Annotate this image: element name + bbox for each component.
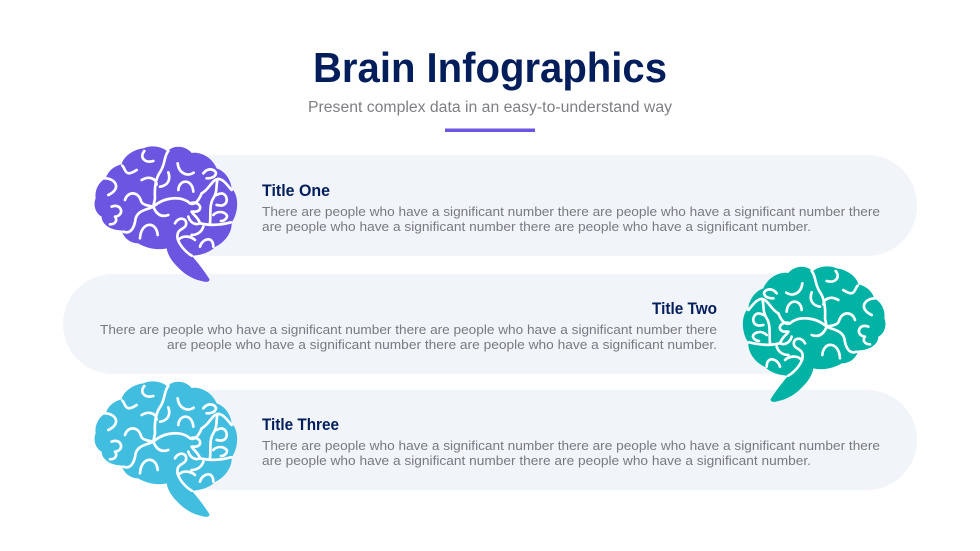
heading: title one: Title One bbox=[262, 182, 330, 200]
panel background three bbox=[165, 390, 917, 490]
text block one: are people who have a significant number there are people who have a significant number. bbox=[262, 219, 811, 234]
panel background two bbox=[63, 274, 823, 374]
heading: title three: Title Three bbox=[262, 416, 339, 434]
panel background one bbox=[165, 155, 917, 256]
icon: purple brain bbox=[95, 146, 237, 282]
text block three: There are people who have a significant number there are people who have a significant number there bbox=[262, 438, 880, 453]
icon: blue brain bbox=[95, 381, 237, 517]
title: Brain Infographics bbox=[313, 44, 667, 91]
panel: title one bbox=[165, 155, 917, 256]
text block two bbox=[100, 322, 717, 352]
panel: title three bbox=[165, 390, 917, 490]
subtitle: Present complex data in an easy-to-understand way bbox=[308, 99, 672, 116]
text block three: are people who have a significant number there are people who have a significant number. bbox=[262, 453, 811, 468]
text block three bbox=[262, 438, 880, 468]
panel: title two bbox=[63, 274, 823, 374]
text block two: There are people who have a significant number there are people who have a significant number there bbox=[100, 322, 717, 337]
title underline bbox=[445, 128, 535, 132]
heading: title two: Title Two bbox=[652, 300, 717, 318]
text block one: There are people who have a significant number there are people who have a significant number there bbox=[262, 204, 880, 219]
icon: teal brain bbox=[743, 266, 885, 402]
text block one bbox=[262, 204, 880, 234]
text block two: are people who have a significant number there are people who have a significant number. bbox=[167, 337, 717, 352]
